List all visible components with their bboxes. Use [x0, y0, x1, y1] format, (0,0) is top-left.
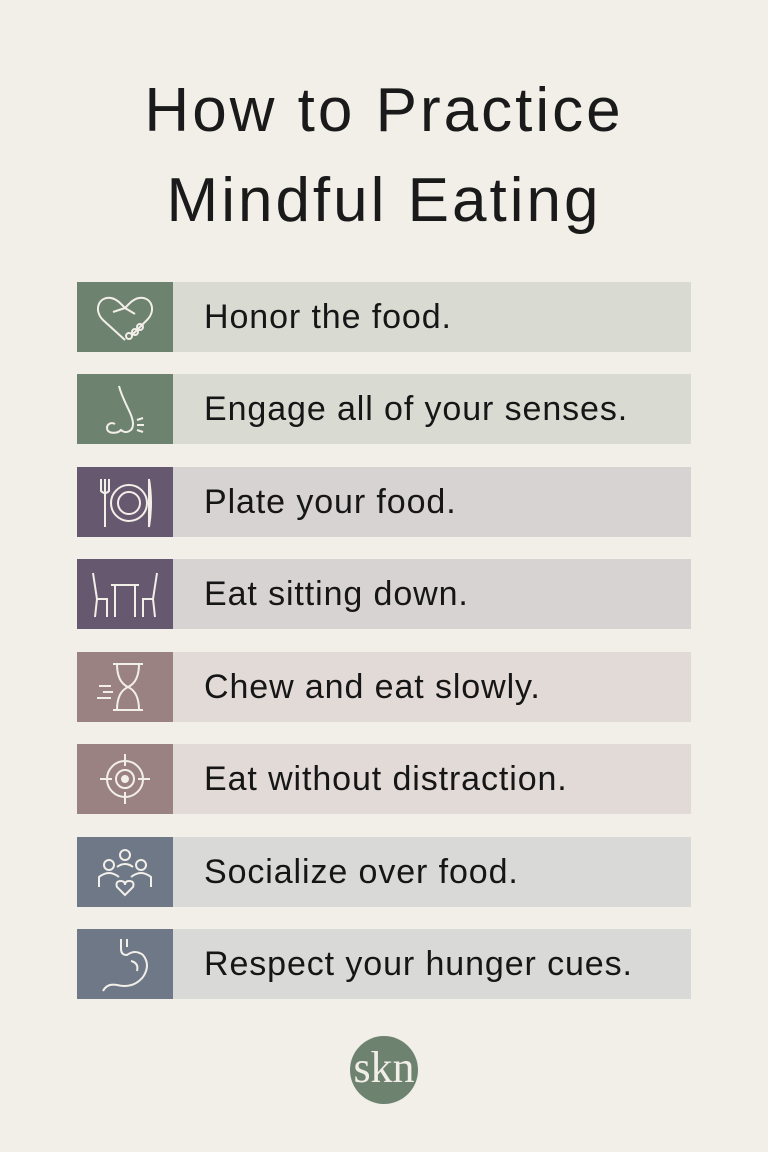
- text: [173, 559, 691, 629]
- icon: handshake heart: [77, 282, 173, 352]
- text: Eat without distraction.: [204, 760, 568, 798]
- text: [173, 837, 691, 907]
- title: How to Practice: [144, 76, 624, 145]
- text: Chew and eat slowly.: [204, 668, 541, 706]
- row 2: senses: [77, 374, 691, 444]
- icon: people with heart: [77, 837, 173, 907]
- row 7: socialize: [77, 837, 691, 907]
- icon: target: [77, 744, 173, 814]
- icon: plate and fork: [77, 467, 173, 537]
- text: [173, 929, 691, 999]
- text: Plate your food.: [204, 483, 457, 521]
- logo: [350, 1036, 418, 1104]
- row 5: chew slowly: [77, 652, 691, 722]
- icon: table and chairs: [77, 559, 173, 629]
- row 6: distraction: [77, 744, 691, 814]
- row 8: hunger cues: [77, 929, 691, 999]
- icon: nose: [77, 374, 173, 444]
- text: [173, 467, 691, 537]
- text: [173, 744, 691, 814]
- text: [173, 652, 691, 722]
- icon: stomach: [77, 929, 173, 999]
- text: [173, 282, 691, 352]
- icon: hourglass: [77, 652, 173, 722]
- text: Socialize over food.: [204, 853, 519, 891]
- row 3: plate: [77, 467, 691, 537]
- text: Respect your hunger cues.: [204, 945, 633, 983]
- row 1: honor the food: [77, 282, 691, 352]
- text: Engage all of your senses.: [204, 390, 628, 428]
- row 4: sitting: [77, 559, 691, 629]
- title: Mindful Eating: [167, 166, 601, 235]
- text: Honor the food.: [204, 298, 452, 336]
- text: [173, 374, 691, 444]
- title: [144, 76, 624, 235]
- logo: skn: [353, 1043, 415, 1092]
- text: Eat sitting down.: [204, 575, 469, 613]
